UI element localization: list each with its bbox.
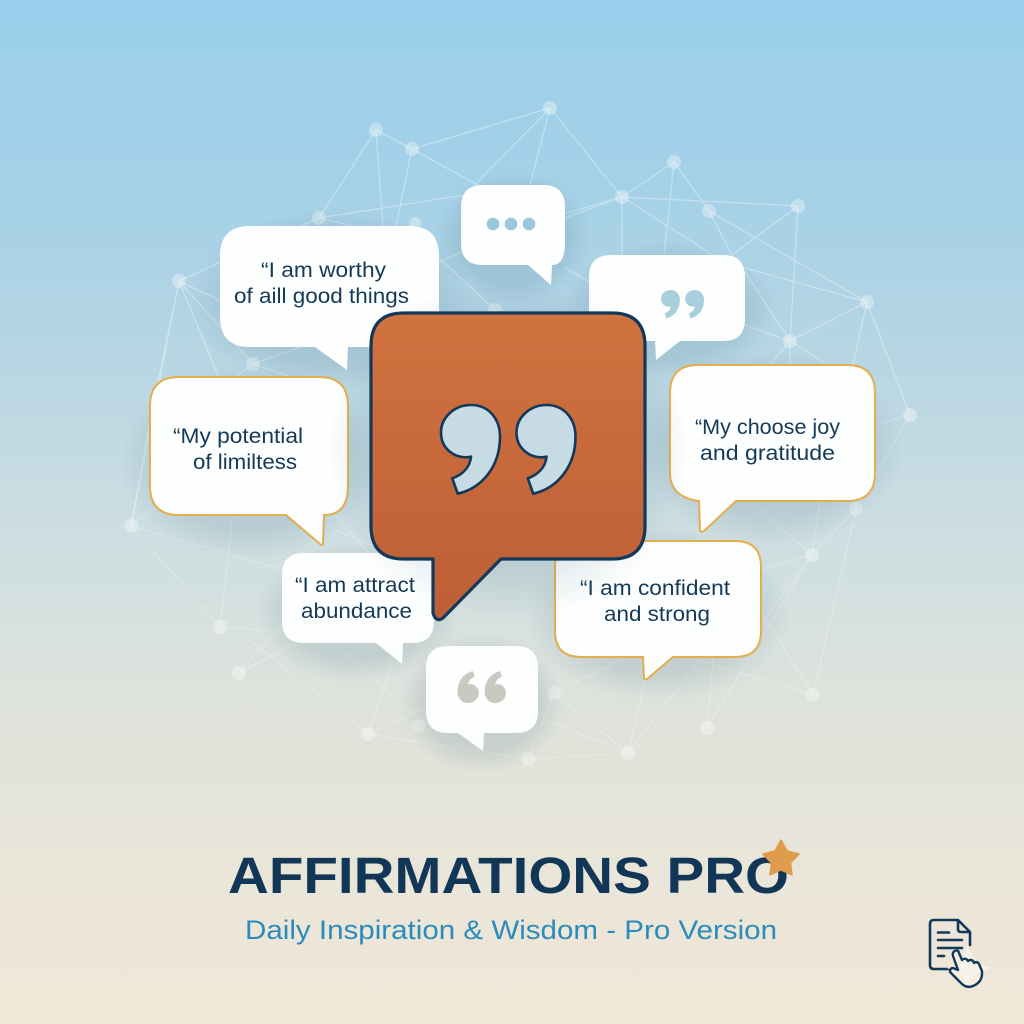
bubble: joy affirmation: and gratitude bbox=[700, 442, 835, 465]
bubble: joy affirmation: “My choose joy bbox=[695, 416, 841, 439]
bubble: worthy affirmation: of aill good things bbox=[234, 285, 409, 308]
bubble: worthy affirmation bbox=[188, 208, 472, 392]
bubble: abundance affirmation bbox=[256, 542, 460, 682]
bubble: confident affirmation: “I am confident bbox=[580, 577, 730, 600]
icon: large quotation marks bbox=[441, 405, 576, 494]
title: AFFIRMATIONS PRO bbox=[228, 847, 789, 904]
bubble: typing dots bbox=[435, 172, 591, 304]
bubble: worthy affirmation: “I am worthy bbox=[261, 259, 387, 282]
subtitle: Daily Inspiration & Wisdom - Pro Version bbox=[245, 915, 777, 945]
central orange quote bubble bbox=[328, 280, 688, 620]
bubble: confident affirmation: and strong bbox=[604, 603, 710, 626]
bubble: joy affirmation bbox=[639, 350, 905, 546]
bubble: potential affirmation: “My potential bbox=[173, 425, 303, 448]
bubble: potential affirmation: of limiltess bbox=[193, 451, 297, 474]
bubble: confident affirmation bbox=[524, 528, 792, 700]
bubble: opening quote bbox=[400, 634, 564, 774]
bubble: abundance affirmation: abundance bbox=[301, 600, 412, 623]
icon: star bbox=[763, 840, 799, 875]
bubble: abundance affirmation: “I am attract bbox=[295, 574, 415, 597]
network background bbox=[124, 101, 917, 766]
icon: document with hand cursor bbox=[930, 920, 992, 990]
bubble: potential affirmation bbox=[119, 364, 379, 560]
bubble: closing quote bbox=[559, 240, 775, 380]
